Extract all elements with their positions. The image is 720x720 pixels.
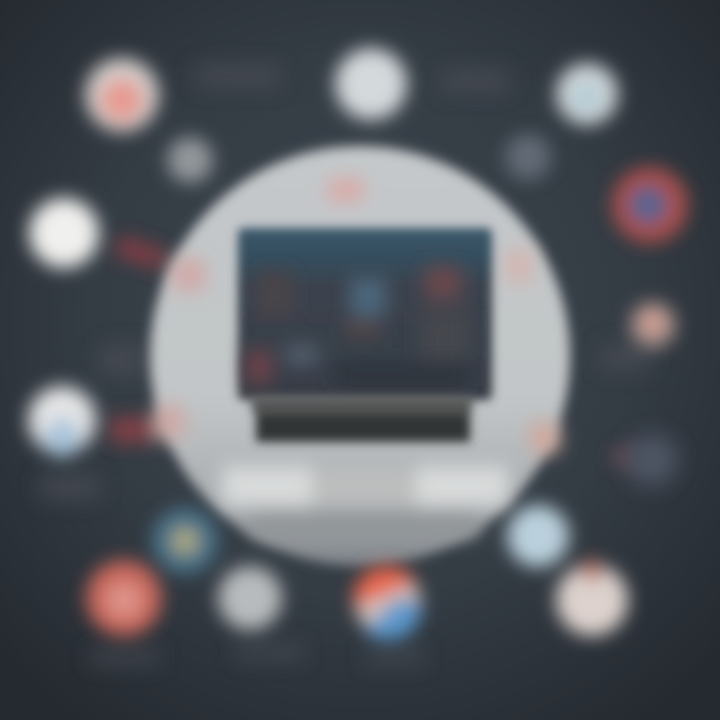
icon: blue and yellow circle	[152, 508, 218, 574]
faint caption placeholders	[40, 65, 650, 664]
icon: top right blue circle	[556, 63, 618, 125]
icon: bottom red white blue circle	[353, 566, 422, 640]
connector: right	[505, 248, 642, 466]
icon: right dark figure	[626, 434, 678, 486]
laptop	[222, 228, 508, 538]
laptop base	[222, 466, 508, 538]
icon: bottom grey circle	[218, 566, 282, 630]
icon: left white circle	[29, 198, 99, 268]
central disc	[150, 146, 570, 566]
icon: small grey upper left	[167, 137, 213, 183]
screen chart details	[246, 266, 470, 386]
icon: right red and blue circle	[612, 167, 688, 243]
icon: bottom left red circle	[86, 560, 162, 636]
icon: left lower circle	[28, 386, 96, 457]
icon: right light blue circle	[507, 505, 569, 567]
laptop screen	[238, 228, 492, 400]
icon: top left pink circle	[85, 58, 159, 132]
connector: upper left	[114, 234, 206, 292]
connector: lower left	[110, 404, 185, 444]
icon: right small salmon circle	[630, 302, 676, 348]
icon: top center circle	[335, 48, 407, 120]
red accent at top of disc	[328, 178, 364, 202]
icon: bottom right pink circle	[556, 559, 628, 636]
laptop keyboard band	[252, 396, 472, 442]
icon: small slate upper right	[505, 134, 551, 180]
